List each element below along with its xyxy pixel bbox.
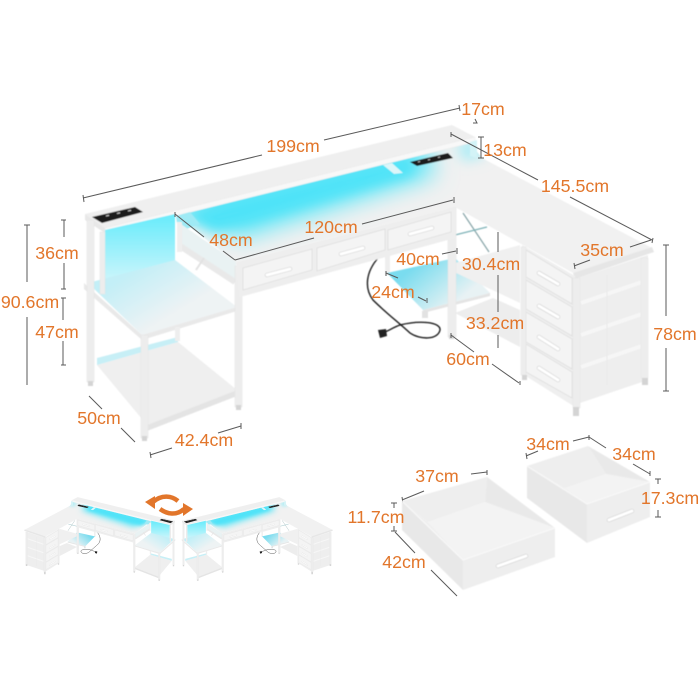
dimension labels: 120cm <box>304 217 358 237</box>
icon: reversible swap arrows <box>145 496 193 516</box>
dimension labels: 40cm <box>396 249 440 269</box>
dimension labels: 24cm <box>371 282 415 302</box>
dimension labels: 34cm <box>526 434 570 454</box>
dimension labels: 13cm <box>483 140 527 160</box>
dimension labels: 11.7cm <box>348 507 404 527</box>
dimension labels: 35cm <box>580 240 624 260</box>
dimension labels: 47cm <box>35 322 79 342</box>
dimension labels: 36cm <box>35 243 79 263</box>
dimension labels: 199cm <box>266 136 320 156</box>
dimension labels: 48cm <box>209 230 253 250</box>
dimension labels <box>1 99 699 572</box>
dimension labels: 17cm <box>461 99 505 119</box>
dimension labels: 78cm <box>653 324 697 344</box>
main L-shaped desk illustration <box>84 125 654 441</box>
dimension labels: 30.4cm <box>462 254 520 274</box>
dimension labels: 42.4cm <box>175 430 233 450</box>
dimension labels: 60cm <box>446 349 490 369</box>
dimension labels: 34cm <box>612 444 656 464</box>
dimension labels: 42cm <box>382 552 426 572</box>
large drawer <box>402 477 555 590</box>
dimension labels: 50cm <box>77 408 121 428</box>
dimension labels: 37cm <box>415 466 459 486</box>
small mirrored layout thumbnail: left <box>24 497 175 581</box>
dimension labels: 33.2cm <box>466 313 524 333</box>
dimension lines <box>24 105 669 596</box>
dimension labels: 145.5cm <box>541 176 609 196</box>
small drawer <box>527 446 650 543</box>
dimension labels: 90.6cm <box>1 292 59 312</box>
small layout thumbnail: right <box>182 497 333 581</box>
dimension labels: 17.3cm <box>641 488 699 508</box>
